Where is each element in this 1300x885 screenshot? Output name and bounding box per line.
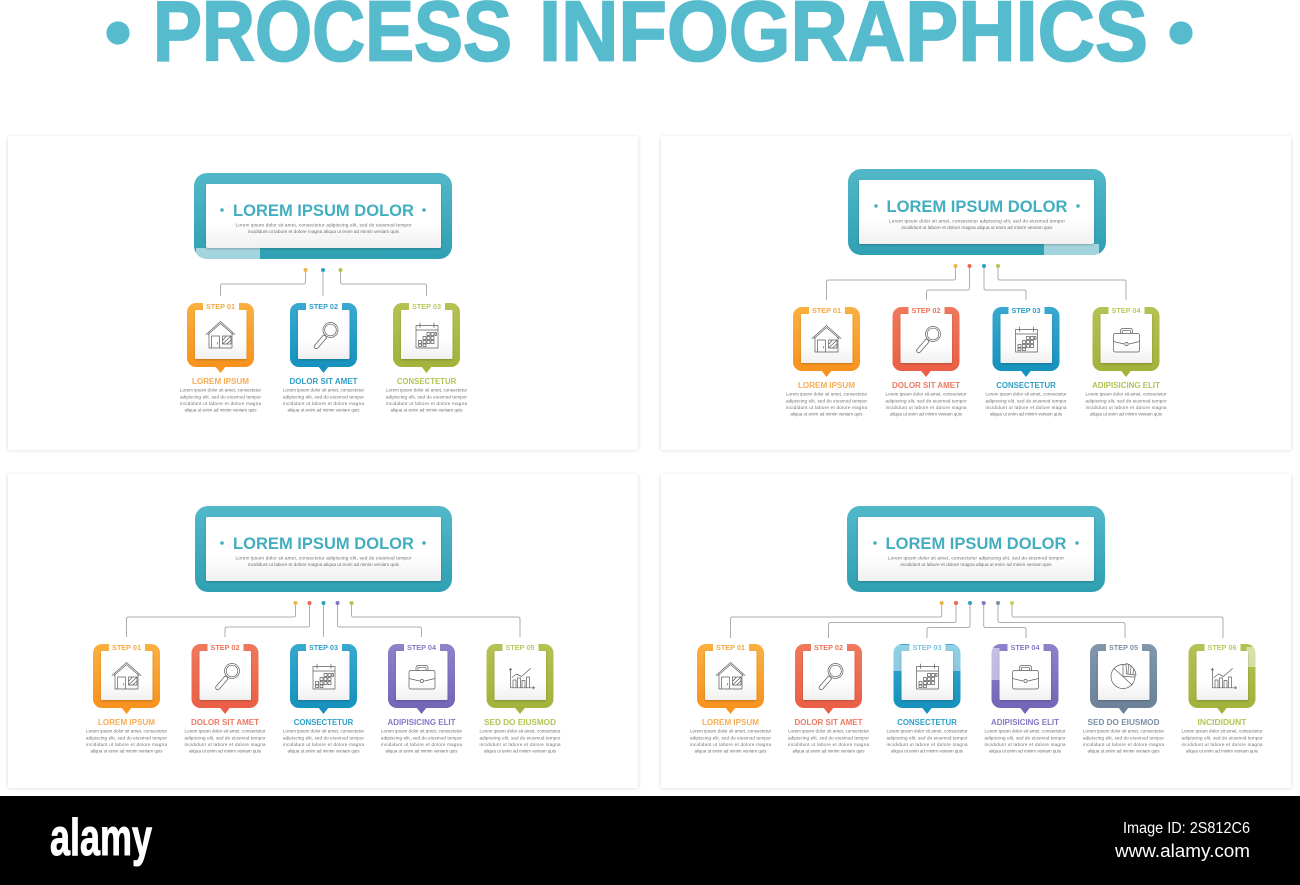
step 03 card: Lorem ipsum dolor sit amet, consectetur: [283, 729, 364, 734]
step 06 card: incididunt ut labore et dolore magna: [1182, 742, 1263, 747]
step 03 card: aliqua ut enim ad minim veniam quis: [288, 748, 360, 754]
step 01 card: aliqua ut enim ad minim veniam quis: [184, 408, 257, 412]
step 04 card: ADIPISICING ELIT: [991, 717, 1060, 727]
step 03 card: aliqua ut enim ad minim veniam quis: [891, 748, 964, 754]
step 02 card: Lorem ipsum dolor sit amet, consectetur: [788, 729, 870, 734]
step 05 card: Lorem ipsum dolor sit amet, consectetur: [1083, 729, 1164, 734]
step 04 card: [381, 643, 462, 754]
step 05 card: aliqua ut enim ad minim veniam quis: [1088, 748, 1160, 754]
step 04 card: [984, 643, 1066, 754]
header box: [195, 506, 452, 592]
step 02 card: adipiscing elit, sed do eiusmod tempor: [886, 398, 967, 403]
step 04 card: STEP 04: [1112, 306, 1141, 315]
step 02 card: aliqua ut enim ad minim veniam quis: [890, 412, 963, 416]
connectors: [126, 601, 520, 637]
step 02 card: adipiscing elit, sed do eiusmod tempor: [283, 394, 364, 399]
header box: LOREM IPSUM DOLOR: [233, 201, 414, 220]
step 03 card: STEP 03: [412, 302, 441, 311]
step 03 card: [886, 643, 968, 754]
step 06 card: STEP 06: [1208, 643, 1236, 652]
header box: [848, 169, 1106, 255]
step 03 card: aliqua ut enim ad minim veniam quis: [390, 408, 463, 412]
step 04 card: [1086, 306, 1167, 416]
header box: incididunt ut labore et dolore magna aliqua ut enim ad minim veniam quis: [902, 225, 1053, 230]
step 01 card: LOREM IPSUM: [798, 380, 855, 390]
step 02 card: [788, 643, 870, 754]
step 02 card: STEP 02: [912, 306, 940, 315]
step 02 card: adipiscing elit, sed do eiusmod tempor: [184, 735, 266, 740]
step 03 card: adipiscing elit, sed do eiusmod tempor: [386, 394, 468, 399]
connectors: [730, 601, 1223, 638]
step 03 card: Lorem ipsum dolor sit amet, consectetur: [886, 729, 968, 734]
step 04 card: aliqua ut enim ad minim veniam quis: [386, 748, 458, 754]
step 02 card: [283, 302, 364, 412]
header box: [194, 173, 452, 259]
step 04 card: adipiscing elit, sed do eiusmod tempor: [381, 735, 462, 740]
step 01 card: adipiscing elit, sed do eiusmod tempor: [180, 394, 262, 399]
step 05 card: STEP 05: [1109, 643, 1139, 652]
alamy logo: alamy: [50, 809, 152, 867]
step 05 card: SED DO EIUSMOD: [1088, 717, 1160, 727]
step 06 card: [1182, 643, 1263, 754]
step 01 card: incididunt ut labore et dolore magna: [786, 405, 867, 410]
step 01 card: adipiscing elit, sed do eiusmod tempor: [690, 735, 772, 740]
step 01 card: adipiscing elit, sed do eiusmod tempor: [786, 398, 868, 403]
step 03 card: [386, 302, 468, 412]
step 01 card: aliqua ut enim ad minim veniam quis: [790, 412, 863, 416]
step 05 card: STEP 05: [506, 643, 535, 652]
step 03 card: CONSECTETUR: [897, 717, 957, 727]
step 04 card: Lorem ipsum dolor sit amet, consectetur: [381, 729, 462, 734]
step 03 card: CONSECTETUR: [294, 717, 354, 727]
header box: incididunt ut labore et dolore magna aliqua ut enim ad minim veniam quis: [248, 229, 400, 234]
step 03 card: aliqua ut enim ad minim veniam quis: [990, 412, 1063, 416]
step 02 card: STEP 02: [309, 302, 338, 311]
step 02 card: [886, 306, 967, 416]
step 01 card: STEP 01: [112, 643, 142, 652]
header box: Lorem ipsum dolor sit amet, consectetur adipiscing elit, sed do eiusmod tempor: [889, 218, 1065, 224]
step 01 card: Lorem ipsum dolor sit amet, consectetur: [786, 392, 868, 397]
step 03 card: STEP 03: [1012, 306, 1040, 315]
step 02 card: Lorem ipsum dolor sit amet, consectetur: [283, 388, 364, 393]
step 02 card: [184, 643, 266, 754]
step 02 card: DOLOR SIT AMET: [290, 376, 358, 386]
step 02 card: DOLOR SIT AMET: [191, 717, 260, 727]
step 02 card: DOLOR SIT AMET: [892, 380, 961, 390]
step 04 card: STEP 04: [1010, 643, 1040, 652]
step 04 card: Lorem ipsum dolor sit amet, consectetur: [984, 729, 1066, 734]
step 01 card: aliqua ut enim ad minim veniam quis: [90, 748, 163, 754]
connectors: [826, 264, 1126, 300]
step 05 card: [480, 643, 561, 754]
step 04 card: incididunt ut labore et dolore magna: [381, 742, 462, 747]
step 06 card: INCIDIDUNT: [1198, 717, 1247, 727]
step 02 card: incididunt ut labore et dolore magna: [283, 401, 364, 406]
header box: Lorem ipsum dolor sit amet, consectetur adipiscing elit, sed do eiusmod tempor: [236, 556, 412, 560]
step 02 card: incididunt ut labore et dolore magna: [788, 742, 869, 747]
step 03 card: STEP 03: [912, 643, 942, 652]
step 02 card: adipiscing elit, sed do eiusmod tempor: [788, 735, 870, 740]
step 04 card: aliqua ut enim ad minim veniam quis: [1090, 412, 1163, 416]
step 04 card: Lorem ipsum dolor sit amet, consectetur: [1086, 392, 1167, 397]
step 02 card: Lorem ipsum dolor sit amet, consectetur: [886, 392, 967, 397]
step 06 card: aliqua ut enim ad minim veniam quis: [1186, 748, 1259, 754]
step 04 card: incididunt ut labore et dolore magna: [1086, 405, 1167, 410]
step 05 card: Lorem ipsum dolor sit amet, consectetur: [480, 729, 561, 734]
step 02 card: STEP 02: [210, 643, 240, 652]
step 02 card: DOLOR SIT AMET: [794, 717, 863, 727]
step 01 card: Lorem ipsum dolor sit amet, consectetur: [180, 388, 262, 393]
step 04 card: incididunt ut labore et dolore magna: [984, 742, 1066, 747]
header box: Lorem ipsum dolor sit amet, consectetur adipiscing elit, sed do eiusmod tempor: [236, 222, 412, 228]
step 04 card: STEP 04: [407, 643, 437, 652]
step 04 card: aliqua ut enim ad minim veniam quis: [989, 748, 1062, 754]
header box: incididunt ut labore et dolore magna aliqua ut enim ad minim veniam quis: [900, 562, 1052, 567]
step 01 card: incididunt ut labore et dolore magna: [86, 742, 167, 747]
step 03 card: Lorem ipsum dolor sit amet, consectetur: [386, 388, 468, 393]
step 01 card: STEP 01: [716, 643, 746, 652]
step 01 card: [786, 306, 868, 416]
step 01 card: STEP 01: [812, 306, 842, 315]
connectors: [220, 268, 426, 296]
step 05 card: SED DO EIUSMOD: [484, 717, 556, 727]
step 03 card: incididunt ut labore et dolore magna: [386, 401, 467, 406]
step 02 card: aliqua ut enim ad minim veniam quis: [189, 748, 262, 754]
header box: Lorem ipsum dolor sit amet, consectetur adipiscing elit, sed do eiusmod tempor: [888, 556, 1064, 560]
panel: four step process: [661, 136, 1291, 450]
header box: LOREM IPSUM DOLOR: [886, 197, 1068, 216]
step 05 card: incididunt ut labore et dolore magna: [1083, 742, 1164, 747]
step 01 card: LOREM IPSUM: [98, 717, 155, 727]
step 02 card: Lorem ipsum dolor sit amet, consectetur: [184, 729, 266, 734]
step 01 card: [690, 643, 772, 754]
step 02 card: aliqua ut enim ad minim veniam quis: [792, 748, 865, 754]
step 03 card: incididunt ut labore et dolore magna: [283, 742, 364, 747]
header box: LOREM IPSUM DOLOR: [233, 534, 414, 553]
website: www.alamy.com: [1114, 841, 1250, 861]
step 03 card: CONSECTETUR: [397, 376, 457, 386]
step 01 card: adipiscing elit, sed do eiusmod tempor: [86, 735, 168, 740]
step 03 card: adipiscing elit, sed do eiusmod tempor: [283, 735, 364, 740]
image id: Image ID: 2S812C6: [1123, 820, 1250, 837]
step 05 card: aliqua ut enim ad minim veniam quis: [484, 748, 557, 754]
step 03 card: incididunt ut labore et dolore magna: [886, 742, 968, 747]
step 03 card: Lorem ipsum dolor sit amet, consectetur: [986, 392, 1067, 397]
header box: LOREM IPSUM DOLOR: [886, 534, 1066, 553]
step 01 card: STEP 01: [206, 302, 236, 311]
step 04 card: ADIPISICING ELIT: [1092, 380, 1161, 390]
step 01 card: LOREM IPSUM: [192, 376, 249, 386]
step 02 card: incididunt ut labore et dolore magna: [184, 742, 266, 747]
step 01 card: Lorem ipsum dolor sit amet, consectetur: [690, 729, 772, 734]
step 03 card: adipiscing elit, sed do eiusmod tempor: [986, 398, 1067, 403]
step 04 card: ADIPISICING ELIT: [388, 717, 456, 727]
step 03 card: STEP 03: [309, 643, 338, 652]
step 02 card: aliqua ut enim ad minim veniam quis: [288, 408, 360, 412]
step 05 card: adipiscing elit, sed do eiusmod tempor: [1083, 735, 1164, 740]
step 03 card: [986, 306, 1067, 416]
step 03 card: incididunt ut labore et dolore magna: [986, 405, 1067, 410]
step 02 card: incididunt ut labore et dolore magna: [886, 405, 967, 410]
step 03 card: adipiscing elit, sed do eiusmod tempor: [886, 735, 968, 740]
step 01 card: [86, 643, 168, 754]
step 05 card: [1083, 643, 1164, 754]
step 06 card: Lorem ipsum dolor sit amet, consectetur: [1182, 729, 1263, 734]
step 01 card: [180, 302, 262, 412]
header box: incididunt ut labore et dolore magna aliqua ut enim ad minim veniam quis: [248, 562, 400, 567]
step 03 card: [283, 643, 364, 754]
step 01 card: aliqua ut enim ad minim veniam quis: [694, 748, 767, 754]
step 03 card: CONSECTETUR: [996, 380, 1056, 390]
step 01 card: LOREM IPSUM: [702, 717, 759, 727]
panel: five step process: [8, 474, 638, 788]
step 05 card: adipiscing elit, sed do eiusmod tempor: [480, 735, 561, 740]
step 01 card: incididunt ut labore et dolore magna: [690, 742, 771, 747]
step 06 card: adipiscing elit, sed do eiusmod tempor: [1182, 735, 1263, 740]
step 02 card: STEP 02: [814, 643, 843, 652]
step 05 card: incididunt ut labore et dolore magna: [480, 742, 561, 747]
step 01 card: incididunt ut labore et dolore magna: [180, 401, 261, 406]
header box: [847, 506, 1105, 592]
step 04 card: adipiscing elit, sed do eiusmod tempor: [1086, 398, 1167, 403]
footer bar: [0, 796, 1300, 885]
panel: three step process: [8, 136, 638, 450]
title: [106, 0, 1193, 80]
step 04 card: adipiscing elit, sed do eiusmod tempor: [984, 735, 1066, 740]
panel: six step process: [661, 474, 1291, 788]
step 01 card: Lorem ipsum dolor sit amet, consectetur: [86, 729, 168, 734]
